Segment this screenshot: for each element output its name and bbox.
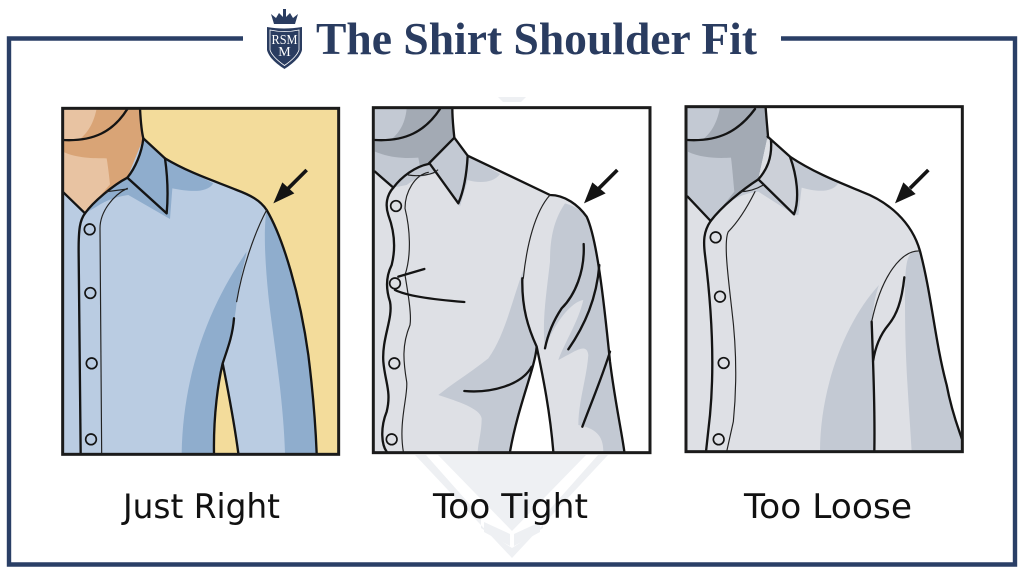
- logo: crest shield: RSM: [272, 33, 298, 48]
- panel: just right: [63, 108, 339, 454]
- shirt shadows: [733, 160, 961, 450]
- shirt shadows: [393, 138, 624, 452]
- shirt lines: [688, 137, 962, 452]
- label: just right: Just Right: [121, 487, 280, 527]
- shirt body: [688, 138, 918, 450]
- logo: crest shield: [267, 9, 302, 69]
- title: The Shirt Shoulder Fit: [316, 14, 757, 64]
- arrow: [895, 170, 928, 203]
- shirt lines: [375, 138, 624, 452]
- shirt body: [64, 143, 285, 453]
- shirt body: [375, 164, 604, 452]
- buttons: [84, 224, 97, 445]
- neck and face: [63, 108, 143, 213]
- label: too loose: Too Loose: [743, 487, 912, 527]
- panel: too tight: [373, 108, 650, 453]
- neck and face: [688, 108, 768, 221]
- buttons: [386, 201, 401, 445]
- label: too tight: Too Tight: [432, 487, 588, 527]
- logo: crest shield: M: [278, 45, 291, 60]
- arrow: [273, 170, 307, 203]
- shirt lines: [63, 138, 317, 453]
- arrow: [584, 170, 617, 203]
- neck and face: [375, 108, 454, 188]
- buttons: [710, 232, 729, 445]
- panel: too loose: [686, 107, 962, 452]
- shirt shadows: [85, 138, 317, 453]
- watermark: faint shield behind panels: [415, 97, 608, 558]
